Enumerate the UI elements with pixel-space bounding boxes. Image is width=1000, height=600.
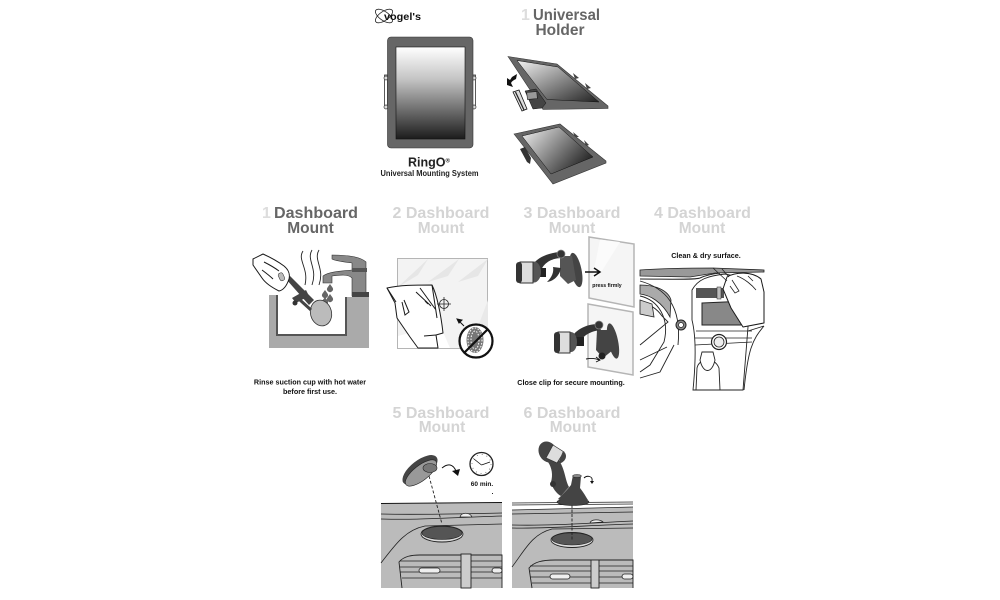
icon: no fingerprints	[460, 324, 492, 358]
gauge hood	[640, 285, 671, 317]
heading: 1 Universal Holder: Holder	[535, 22, 585, 39]
illustration: rinsing suction cup under tap	[253, 250, 369, 348]
heading: 1 Dashboard Mount	[262, 205, 358, 237]
heading line: Mount: Mount	[418, 220, 464, 237]
illustration: press mount firmly	[516, 237, 634, 307]
hand	[723, 273, 764, 327]
centre console	[692, 274, 748, 390]
heading line: Mount 4: Mount	[679, 220, 725, 237]
label: 60 min.: 60 min.	[471, 481, 493, 488]
heading line: Mount 5: Mount	[419, 419, 465, 436]
cloth and hand	[387, 285, 443, 348]
arrow	[585, 268, 600, 276]
curved arrow	[442, 465, 456, 471]
heading: 1 Dashboard Mount: Dashboard	[274, 205, 358, 222]
illustration: wiping surface with cloth	[387, 258, 492, 358]
product name: RingO: ®	[446, 158, 451, 164]
illustration: tablet sliding into holder	[507, 56, 608, 111]
logo: vogel's	[373, 7, 421, 25]
suction cup	[307, 298, 335, 328]
heading: 1 Universal Holder: 1	[521, 7, 530, 24]
heading: 2 Dashboard Mount: 2 Dashboard	[393, 205, 489, 222]
product name: RingO	[380, 156, 479, 178]
illustration: RingO tablet front view	[384, 37, 476, 148]
illustration: mount fixed on dashboard	[512, 438, 633, 588]
dashed line	[429, 476, 442, 524]
faucet	[323, 255, 366, 296]
illustration: close clip	[554, 304, 633, 375]
steering wheel	[640, 281, 679, 378]
steam	[301, 250, 321, 285]
dashed line	[571, 505, 573, 540]
heading: 1 Universal Holder	[521, 7, 600, 39]
rotation arrow	[584, 476, 592, 481]
caption: rinse suction cup: before first use.	[283, 387, 337, 396]
heading: 1 Universal Holder: Universal	[533, 7, 600, 24]
icon: curved arrow down	[507, 74, 517, 87]
water drops	[322, 284, 333, 305]
caption: rinse suction cup: Rinse suction cup with hot water	[254, 378, 366, 386]
heading: 5 Dashboard Mount: 5 Dashboard	[393, 405, 489, 422]
sink	[269, 295, 369, 348]
air vent	[399, 555, 502, 588]
heading: 1 Dashboard Mount: Mount	[287, 220, 334, 237]
crosshair	[437, 297, 451, 311]
caption: rinse suction cup	[254, 378, 366, 396]
product name: RingO: Universal Mounting System	[380, 169, 479, 178]
logo: vogel's: vogel's	[384, 11, 421, 23]
heading: 3 Dashboard Mount: 3 Dashboard	[524, 205, 620, 222]
label: press firmly: press firmly	[592, 283, 622, 289]
illustration: car interior with wiping hand	[640, 268, 764, 390]
heading: 1 Dashboard Mount: 1	[262, 205, 271, 222]
heading: 6 Dashboard Mount: 6 Dashboard	[524, 405, 620, 422]
caption: clean and dry surface: Clean & dry surface.	[671, 251, 741, 260]
icon: small arrow	[457, 319, 464, 326]
illustration: suction disc pressed on dashboard	[381, 450, 502, 588]
hand	[253, 254, 289, 291]
heading: 4 Dashboard Mount: 4 Dashboard	[654, 205, 751, 222]
product name: RingO: RingO	[408, 156, 446, 170]
suction mount	[557, 498, 589, 506]
heading line: Mount 6: Mount	[550, 419, 596, 436]
icon: clock	[470, 452, 493, 476]
caption: close clip: Close clip for secure mounting.	[517, 378, 625, 387]
suction disc	[398, 450, 442, 490]
illustration: tablet in holder	[514, 124, 606, 184]
heading line: Mount 3: Mount	[549, 220, 595, 237]
